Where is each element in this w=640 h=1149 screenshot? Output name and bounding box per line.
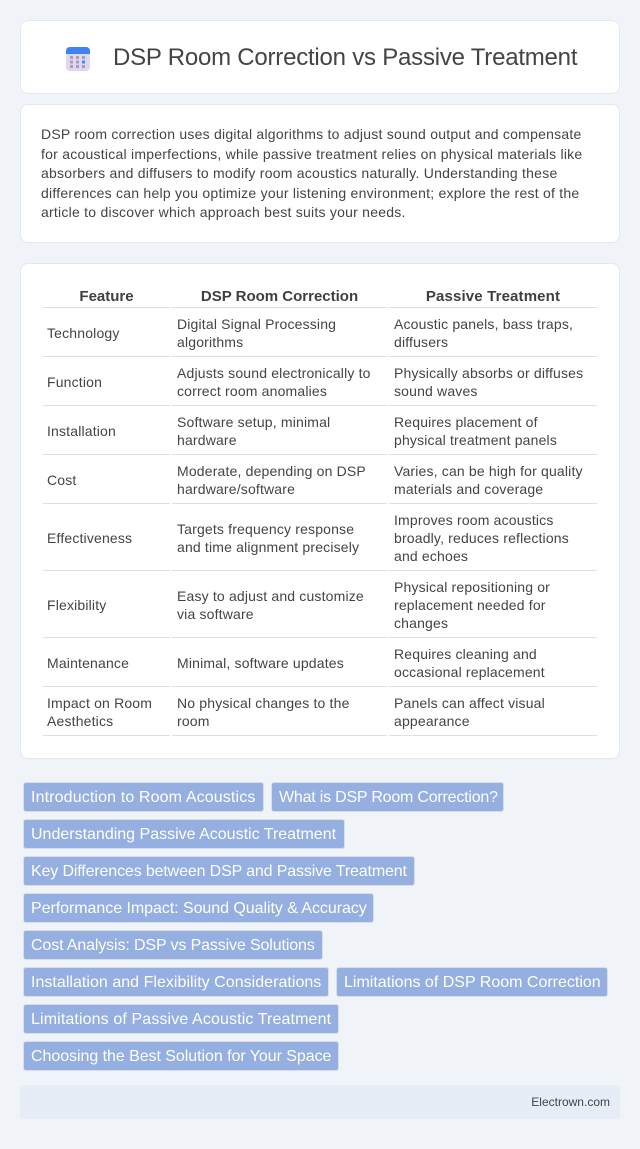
row: Effectiveness: Targets frequency response bbox=[177, 521, 354, 537]
row: Technology: Technology bbox=[47, 325, 120, 341]
intro text bbox=[41, 126, 582, 220]
topic tags bbox=[23, 782, 608, 1071]
tag: Introduction to Room Acoustics bbox=[31, 789, 255, 806]
row: Maintenance: occasional replacement bbox=[394, 664, 545, 680]
row: Impact on Room Aesthetics: No physical changes to the bbox=[177, 695, 350, 711]
row: Installation: Installation bbox=[47, 423, 116, 439]
row: Installation bbox=[43, 414, 597, 455]
row: Impact on Room Aesthetics bbox=[43, 695, 597, 736]
row: Installation: Software setup, minimal bbox=[177, 414, 330, 430]
intro text: DSP room correction uses digital algorithms to adjust sound output and compensate bbox=[41, 126, 582, 142]
tag: Installation and Flexibility Considerations bbox=[31, 974, 321, 991]
icon: calendar bbox=[66, 47, 90, 71]
tag bbox=[23, 893, 374, 923]
tag bbox=[23, 856, 415, 886]
tag bbox=[23, 1004, 339, 1034]
tag: Limitations of Passive Acoustic Treatment bbox=[31, 1011, 331, 1028]
row: Technology bbox=[43, 316, 597, 357]
row: Effectiveness: broadly, reduces reflections bbox=[394, 530, 569, 546]
tag: Understanding Passive Acoustic Treatment bbox=[31, 826, 336, 843]
row: Cost: Varies, can be high for quality bbox=[394, 463, 583, 479]
row: Technology: diffusers bbox=[394, 334, 448, 350]
row: Effectiveness: and echoes bbox=[394, 548, 468, 564]
row: Flexibility: Flexibility bbox=[47, 597, 106, 613]
tag: Choosing the Best Solution for Your Space bbox=[31, 1048, 331, 1065]
row: Cost: hardware/software bbox=[177, 481, 295, 497]
tag bbox=[23, 1041, 339, 1071]
row: Function: Adjusts sound electronically to bbox=[177, 365, 371, 381]
row: Technology: Digital Signal Processing bbox=[177, 316, 336, 332]
row: Flexibility: replacement needed for bbox=[394, 597, 546, 613]
row: Effectiveness bbox=[43, 512, 597, 571]
row: Impact on Room Aesthetics: Panels can affect visual bbox=[394, 695, 545, 711]
row: Flexibility: via software bbox=[177, 606, 254, 622]
row: Impact on Room Aesthetics: appearance bbox=[394, 713, 470, 729]
tag: Key Differences between DSP and Passive Treatment bbox=[31, 863, 407, 880]
header panel bbox=[20, 20, 620, 94]
tag: What is DSP Room Correction? bbox=[279, 789, 498, 806]
tag: Performance Impact: Sound Quality & Accuracy bbox=[31, 900, 367, 917]
tag: Cost Analysis: DSP vs Passive Solutions bbox=[31, 937, 315, 954]
row: Maintenance: Maintenance bbox=[47, 655, 129, 671]
row: Maintenance bbox=[43, 646, 597, 687]
row: Maintenance: Requires cleaning and bbox=[394, 646, 537, 662]
intro text: for acoustical imperfections, while passive treatment relies on physical materials like bbox=[41, 146, 582, 162]
tag bbox=[23, 967, 329, 997]
row: Effectiveness: and time alignment precisely bbox=[177, 539, 359, 555]
row: Cost: Cost bbox=[47, 472, 76, 488]
row: Technology: Acoustic panels, bass traps, bbox=[394, 316, 573, 332]
row: Function: sound waves bbox=[394, 383, 478, 399]
row: Function bbox=[43, 365, 597, 406]
row: Installation: physical treatment panels bbox=[394, 432, 557, 448]
row: Flexibility: Physical repositioning or bbox=[394, 579, 550, 595]
row: Technology: algorithms bbox=[177, 334, 243, 350]
row: Flexibility: changes bbox=[394, 615, 448, 631]
row: Cost: Moderate, depending on DSP bbox=[177, 463, 366, 479]
row: Function: Function bbox=[47, 374, 102, 390]
title: DSP Room Correction vs Passive Treatment bbox=[113, 44, 577, 71]
row: Installation: hardware bbox=[177, 432, 237, 448]
tag bbox=[336, 967, 608, 997]
row: Impact on Room Aesthetics: Impact on Room bbox=[47, 695, 152, 711]
table header: Passive Treatment bbox=[426, 288, 560, 305]
row: Impact on Room Aesthetics: Aesthetics bbox=[47, 713, 113, 729]
row: Function: correct room anomalies bbox=[177, 383, 327, 399]
row: Maintenance: Minimal, software updates bbox=[177, 655, 344, 671]
row: Effectiveness: Improves room acoustics bbox=[394, 512, 554, 528]
intro panel bbox=[20, 104, 620, 243]
tag bbox=[23, 930, 323, 960]
table header: DSP Room Correction bbox=[201, 288, 358, 305]
footer credit: Electrown.com bbox=[531, 1095, 610, 1109]
row: Effectiveness: Effectiveness bbox=[47, 530, 132, 546]
row: Impact on Room Aesthetics: room bbox=[177, 713, 210, 729]
row: Cost bbox=[43, 463, 597, 504]
tag bbox=[23, 819, 345, 849]
intro text: article to discover which approach best suits your needs. bbox=[41, 204, 406, 220]
footer bbox=[20, 1085, 620, 1119]
row: Flexibility bbox=[43, 579, 597, 638]
row: Installation: Requires placement of bbox=[394, 414, 538, 430]
tag: Limitations of DSP Room Correction bbox=[344, 974, 601, 991]
table header bbox=[43, 288, 597, 308]
intro text: absorbers and diffusers to modify room acoustics naturally. Understanding these bbox=[41, 165, 557, 181]
tag bbox=[271, 782, 504, 812]
comparison table panel bbox=[20, 263, 620, 759]
row: Flexibility: Easy to adjust and customize bbox=[177, 588, 364, 604]
tag bbox=[23, 782, 264, 812]
row: Cost: materials and coverage bbox=[394, 481, 543, 497]
intro text: differences can help you optimize your listening environment; explore the rest of the bbox=[41, 185, 579, 201]
row: Function: Physically absorbs or diffuses bbox=[394, 365, 583, 381]
table header: Feature bbox=[79, 288, 134, 305]
